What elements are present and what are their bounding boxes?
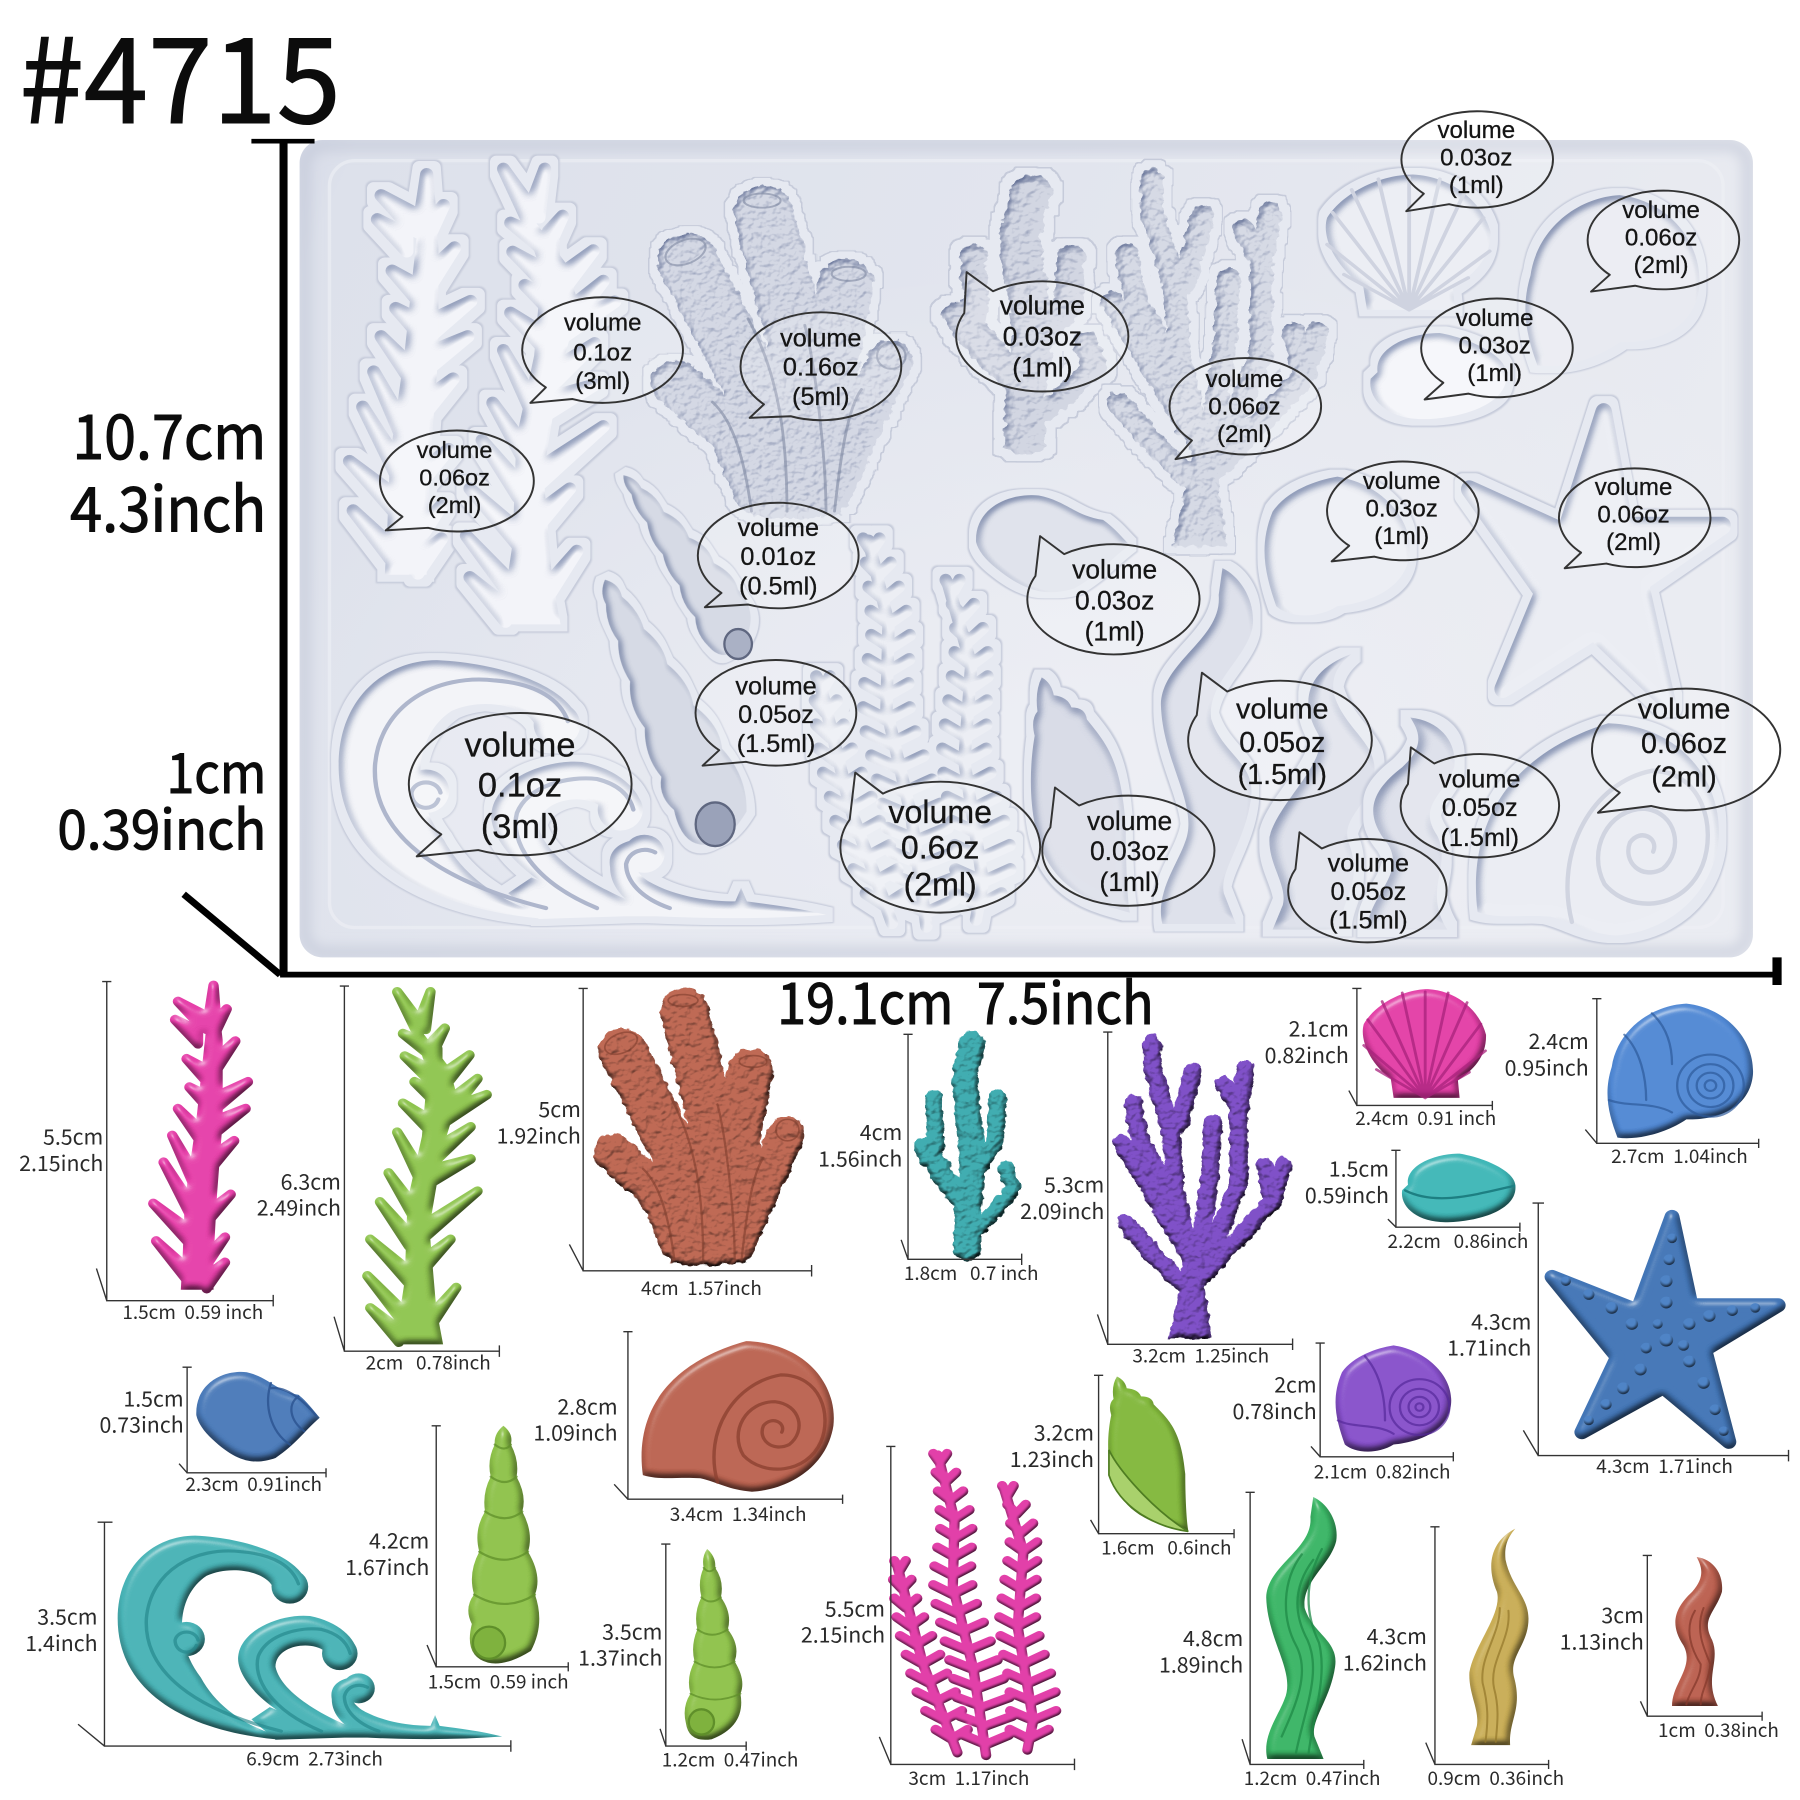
figure [642,1341,834,1492]
figure [153,985,248,1290]
height: 4cm [860,1116,902,1147]
panel: teal wave [25,1522,511,1772]
panel: blue starfish [1447,1203,1789,1479]
height: 3cm [1601,1599,1644,1630]
width: 2.1cm 0.82inch [1314,1458,1450,1485]
axes [901,1034,1022,1265]
callout: volume 0.03oz cowrie: 0.03oz [1458,333,1531,360]
panel: small blue snail [99,1367,326,1497]
height: 3.2cm [1034,1417,1094,1448]
height: 5.5cm [825,1592,885,1623]
callout: volume 0.06oz large snail: (2ml) [1651,761,1717,793]
axes [1640,1555,1762,1721]
mould cavity: conch [1031,677,1130,913]
overall height label: 4.3inch [70,460,266,550]
height: 1.89inch [1159,1649,1243,1680]
mould detail: scallop ribs [1327,178,1490,310]
axes [334,986,499,1357]
callout: volume 0.01oz spire shell: 0.01oz [740,543,816,571]
width: 1.2cm 0.47inch [1244,1764,1380,1791]
figure [685,1549,742,1740]
callout: volume 0.05oz spire shell [696,660,856,766]
panel: pink scallop shell [1265,988,1496,1131]
width: 1cm 0.38inch [1658,1716,1779,1743]
whorl lines [268,1383,316,1445]
mould cavity: spire shell 2 [570,563,761,855]
height: 0.82inch [1265,1039,1349,1070]
figure [1336,1345,1451,1452]
callout: volume 0.1oz wave: 0.1oz [478,767,562,805]
mould cavity: whelk shell [1525,195,1700,366]
axes [569,988,812,1277]
callout: volume 0.06oz large snail: volume [1638,694,1730,726]
mould cavity: kelp 1 [1161,568,1253,924]
folds [1282,1549,1322,1753]
axes [660,1544,746,1751]
spiral [1609,1013,1744,1117]
ridges [146,1551,379,1731]
mould cavity: round shell [1265,477,1410,615]
axes [427,1426,568,1671]
width: 6.9cm 2.73inch [246,1745,383,1772]
callout: volume 0.03oz conch: 0.03oz [1090,836,1169,866]
mould cavity: wave [339,660,826,919]
mouth line [1405,1186,1514,1198]
height: 1.13inch [1560,1626,1644,1657]
mould detail: spire 2 opening [696,802,735,846]
callout: volume 0.06oz seaweed: (2ml) [428,492,481,518]
height: 1.56inch [818,1142,902,1173]
mould cavity: tube coral [676,213,890,515]
callout: volume 0.16oz tube coral: (5ml) [792,383,850,411]
bumps [1561,1233,1760,1436]
callout: volume 0.05oz spire shell: volume [735,673,817,701]
axes [1097,1032,1293,1350]
opening [473,1627,505,1659]
width: 2cm 0.78inch [366,1349,491,1376]
callout: volume 0.16oz tube coral: 0.16oz [783,353,859,381]
height: 2.4cm [1528,1025,1589,1056]
mould cavity: branching coral [1112,179,1318,546]
callout: volume 0.05oz kelp 1: 0.05oz [1239,727,1325,759]
callout: volume 0.05oz kelp 3 [1401,747,1559,857]
overall depth label [57,729,266,865]
panel: pink seaweed [19,982,273,1325]
callout: volume 0.03oz small snail [1027,536,1200,654]
width: 2.4cm 0.91 inch [1355,1104,1496,1131]
panel: small green spire shell [578,1544,798,1773]
height: 2.49inch [257,1192,341,1223]
callout: volume 0.06oz starfish: volume [1595,474,1672,501]
callout: volume 0.03oz small snail: volume [1072,555,1157,585]
callout: volume 0.06oz branching coral: 0.06oz [1208,393,1281,420]
width: 3.2cm 1.25inch [1132,1342,1269,1369]
callout: volume 0.05oz kelp 1 [1188,673,1372,800]
callout: volume 0.06oz whelk: (2ml) [1634,252,1689,279]
mould detail: spire 1 opening [724,629,752,659]
axes [96,982,273,1306]
height: 3.5cm [602,1615,662,1646]
panel: teal cowrie [1305,1150,1528,1254]
callout: volume 0.03oz small coral: volume [1000,291,1085,321]
callout: volume 0.06oz large snail [1592,689,1780,813]
height: 0.73inch [99,1409,184,1440]
callout: volume 0.03oz round shell: (1ml) [1374,523,1429,550]
callout: volume 0.03oz round shell: 0.03oz [1365,496,1438,523]
figure [1121,1043,1283,1338]
callout: volume 0.03oz conch: volume [1087,806,1172,836]
callout: volume 0.05oz kelp 2: volume [1328,849,1409,877]
callout: volume 0.1oz seaweed: volume [564,310,642,337]
tray body [300,140,1753,957]
height: 2.09inch [1020,1195,1104,1226]
callout: volume 0.05oz spire shell: (1.5ml) [737,730,815,758]
callout: volume 0.03oz scallop: volume [1437,117,1515,144]
lip [1109,1450,1188,1531]
callout: volume 0.06oz seaweed: 0.06oz [419,465,490,491]
callout: volume 0.05oz kelp 3: 0.05oz [1442,794,1518,822]
height: 3.5cm [37,1600,98,1631]
callout: volume 0.05oz kelp 2: (1.5ml) [1329,907,1408,935]
height: 1.62inch [1343,1646,1427,1677]
figure [1672,1557,1722,1706]
width: 2.2cm 0.86inch [1387,1227,1528,1254]
overall height label [70,387,266,550]
height: 1.23inch [1010,1443,1094,1474]
callout: volume 0.03oz round shell [1327,462,1479,561]
height: 4.2cm [369,1525,429,1556]
callout: volume 0.05oz kelp 2: 0.05oz [1330,878,1406,906]
mould detail: wave ridges [375,680,670,908]
mould cavity: scallop shell [1326,174,1490,310]
mould cavity: large snail [1476,723,1719,935]
mould cavity: small snail [976,495,1130,592]
callout: volume 0.05oz kelp 3: volume [1439,766,1520,794]
overall depth label: 0.39inch [57,785,266,865]
height: 5.3cm [1044,1169,1104,1200]
height: 0.59inch [1305,1179,1389,1210]
height: 1.71inch [1447,1332,1531,1363]
figure [196,1372,320,1461]
opening [689,1709,714,1735]
axes [1585,999,1759,1148]
width: 3cm 1.17inch [908,1764,1029,1791]
panel: green conch [1010,1375,1234,1560]
callout: volume 0.01oz spire shell [698,503,859,608]
panel: purple round shell [1233,1343,1453,1485]
panel: brown snail [533,1332,843,1527]
callout: volume 0.03oz small coral: 0.03oz [1003,322,1082,352]
width: 1.5cm 0.59 inch [428,1668,569,1695]
mould cavity: cowrie [1370,333,1507,419]
whorls [690,1568,740,1700]
figure [1108,1377,1189,1532]
height: 2.8cm [557,1390,618,1421]
tray highlight [300,140,1753,957]
width: 2.7cm 1.04inch [1611,1142,1748,1169]
panel: brown tube coral [497,988,812,1301]
whorls [474,1445,535,1604]
figure [468,1426,539,1664]
height: 1.67inch [345,1551,429,1582]
height: 1.92inch [497,1119,581,1150]
height: 2.15inch [19,1147,103,1178]
height: 6.3cm [281,1165,341,1196]
width: 1.6cm 0.6inch [1101,1533,1232,1560]
callout: volume 0.1oz wave: (3ml) [481,808,559,846]
callout: volume 0.1oz seaweed: 0.1oz [573,339,632,366]
height: 2.15inch [801,1619,885,1650]
callout: volume 0.03oz cowrie [1421,299,1573,399]
tray edge shading [304,145,1748,953]
mould cavity: seaweed 1 [350,174,471,575]
callout: volume 0.6oz fern seaweed: 0.6oz [901,830,979,866]
height: 2.1cm [1289,1013,1349,1044]
axes [879,1446,1074,1770]
tube grooves and openings [601,995,799,1260]
callout: volume 0.06oz whelk: 0.06oz [1625,225,1697,252]
callout: volume 0.03oz cowrie: volume [1456,305,1533,332]
overall width label: 19.1cm 7.5inch [777,957,1154,1041]
callout: volume 0.05oz kelp 1: (1.5ml) [1238,759,1327,791]
height: 1.37inch [578,1642,662,1673]
mould detail: tube openings [661,194,905,511]
callout: volume 0.6oz fern seaweed: volume [888,794,992,830]
mould cavity: spire shell 1 [604,456,767,663]
panel: brown kelp [1560,1555,1779,1743]
overall height label: 10.7cm [72,387,266,477]
panel: teal coral [818,1034,1039,1286]
height: 0.95inch [1505,1052,1589,1083]
axes [1091,1375,1234,1538]
width: 1.5cm 0.59 inch [122,1298,263,1325]
callout: volume 0.03oz scallop: 0.03oz [1440,144,1512,171]
panel: silicone mould tray photo [300,140,1753,957]
width: 1.8cm 0.7 inch [904,1259,1039,1286]
callout: volume 0.03oz cowrie: (1ml) [1467,360,1522,387]
mould cavity: starfish [1469,412,1723,701]
height: 5cm [538,1093,581,1124]
callout: volume 0.03oz small coral [956,272,1128,392]
axes [1426,1527,1549,1769]
callout: volume 0.03oz scallop [1401,111,1553,211]
height: 1.4inch [25,1627,98,1658]
callout: volume 0.6oz fern seaweed [840,773,1040,913]
main dimension axes [184,141,1777,985]
height: 0.78inch [1233,1395,1317,1426]
height: 5.5cm [43,1121,103,1152]
callout: volume 0.06oz seaweed: volume [417,437,492,463]
mould cavity: kelp 3 [1367,717,1455,930]
height: 4.8cm [1183,1622,1243,1653]
callout: volume 0.06oz branching coral: (2ml) [1217,421,1272,448]
panel: blue whelk shell [1505,999,1759,1169]
mould cavity: fern seaweed [815,539,1010,926]
width: 4cm 1.57inch [641,1274,762,1301]
callout: volume 0.01oz spire shell: volume [738,514,819,542]
width: 3.4cm 1.34inch [670,1500,806,1527]
callout: volume 0.03oz round shell: volume [1363,468,1440,495]
callout: volume 0.03oz conch [1042,788,1214,906]
figure [1402,1154,1515,1222]
callout: volume 0.16oz tube coral: volume [780,325,861,353]
mould detail: snail spiral [1567,771,1708,922]
figure [1266,1497,1337,1759]
mould cavity: seaweed 2 [466,169,615,624]
panel: green kelp [1159,1492,1380,1791]
callout: volume 0.1oz seaweed [522,297,683,403]
panel: green seaweed [257,986,499,1376]
callout: volume 0.03oz scallop: (1ml) [1449,172,1504,199]
callout: volume 0.03oz conch: (1ml) [1100,867,1160,897]
figure [1363,989,1486,1098]
figure [925,1044,1012,1249]
axes [1349,988,1492,1110]
overall depth label: 1cm [166,729,266,809]
callout: volume 0.05oz kelp 2 [1288,832,1447,942]
callout: volume 0.06oz branching coral [1170,358,1321,459]
height: 2cm [1274,1368,1317,1399]
folds [1482,1608,1509,1742]
width: 0.9cm 0.36inch [1427,1764,1564,1791]
callout: volume 0.03oz small snail: 0.03oz [1075,586,1154,616]
callout: volume 0.06oz starfish: (2ml) [1606,529,1661,556]
callout: volume 0.06oz whelk [1588,191,1739,292]
height: 4.3cm [1471,1305,1531,1336]
ribs [1364,992,1485,1098]
spiral [1338,1356,1449,1435]
figure [1469,1529,1529,1745]
callout: volume 0.1oz wave: volume [465,727,576,765]
axes [614,1332,843,1504]
axes [1311,1343,1453,1461]
height: 4.3cm [1367,1620,1427,1651]
callout: volume 0.06oz large snail: 0.06oz [1641,728,1727,760]
tray inner rim [329,161,1723,928]
width: 2.3cm 0.91inch [185,1470,322,1497]
axes [1242,1492,1364,1769]
folds [1686,1608,1710,1704]
spiral [714,1375,825,1482]
height: 1.09inch [533,1417,618,1448]
callout: volume 0.1oz seaweed: (3ml) [575,368,630,395]
callout: volume 0.05oz kelp 3: (1.5ml) [1440,824,1519,852]
figure [613,1011,786,1263]
height: 1.5cm [123,1382,184,1413]
callout: volume 0.05oz spire shell: 0.05oz [738,701,814,729]
callout: volume 0.06oz whelk: volume [1622,197,1700,224]
figure [118,1536,502,1740]
callout: volume 0.05oz kelp 1: volume [1236,694,1329,726]
panel: tall green spire shell [345,1426,569,1695]
axes [179,1367,326,1477]
width: 4.3cm 1.71inch [1596,1452,1733,1479]
panel: pink fern seaweed [801,1446,1074,1791]
mould cavity: small coral [959,190,1094,440]
callout: volume 0.06oz branching coral: volume [1206,366,1283,393]
figure [893,1454,1056,1755]
mould cavity: kelp 2 [1269,654,1375,930]
callout: volume 0.06oz starfish [1559,468,1710,568]
callout: volume 0.06oz starfish: 0.06oz [1597,501,1670,528]
callout: volume 0.03oz small coral: (1ml) [1012,353,1072,383]
axes [1388,1150,1520,1232]
axes [78,1522,511,1752]
callout: volume 0.06oz seaweed [380,430,534,532]
panel: purple coral [1020,1032,1293,1369]
callout: volume 0.1oz wave [409,713,632,856]
figure [1552,1217,1778,1442]
callout: volume 0.03oz small snail: (1ml) [1085,617,1145,647]
callout: volume 0.6oz fern seaweed: (2ml) [904,866,977,902]
axes [1523,1203,1789,1461]
figure [1607,1004,1753,1138]
panel: yellow kelp [1343,1527,1564,1791]
callout: volume 0.01oz spire shell: (0.5ml) [739,573,818,601]
figure [367,992,487,1344]
callout: volume 0.16oz tube coral [741,312,901,420]
height: 1.5cm [1329,1153,1389,1184]
width: 1.2cm 0.47inch [662,1746,798,1773]
